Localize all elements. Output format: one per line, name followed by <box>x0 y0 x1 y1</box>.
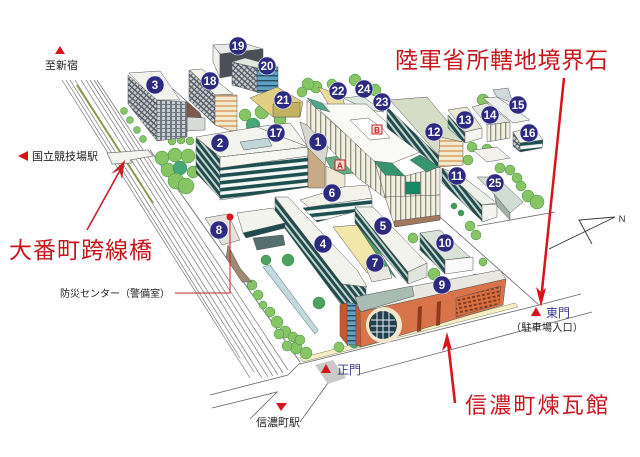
direction: Shinjuku <box>45 46 78 72</box>
long pool <box>263 265 318 334</box>
direction: Shinanomachi station <box>256 403 300 429</box>
numbered building badges: 5 <box>380 221 387 233</box>
numbered building badges: 15 <box>512 100 525 112</box>
building 11 <box>442 168 497 222</box>
numbered building badges: 11 <box>451 171 464 183</box>
building 19 <box>213 43 263 78</box>
marker B <box>372 125 382 135</box>
parking entrance label: （駐車場入口） <box>511 321 583 334</box>
arrow: boundary stone <box>536 78 564 307</box>
building 1 and A wing <box>300 122 365 188</box>
numbered building badges: 3 <box>152 80 158 92</box>
tree clusters <box>120 74 544 359</box>
numbered building badges: 13 <box>459 115 471 127</box>
main gate plaza <box>315 360 346 384</box>
direction: Shinjuku: 至新宿 <box>45 58 78 72</box>
numbered building badges: 18 <box>204 76 217 88</box>
numbered building badges: 6 <box>329 188 335 200</box>
building 8 area <box>205 208 285 282</box>
inner courtyard <box>333 224 396 278</box>
main gate: 正門 <box>337 363 361 377</box>
numbered building badges: 25 <box>489 178 502 190</box>
numbered building badges: 8 <box>216 225 223 237</box>
numbered building badges: 22 <box>332 86 344 98</box>
site front walkway <box>300 303 518 362</box>
east gate: 東門 <box>546 306 570 320</box>
building 21 <box>250 87 303 117</box>
arrow: brick hall <box>442 332 455 403</box>
numbered building badges: 17 <box>270 128 282 140</box>
label: brick hall heading: 信濃町煉瓦館 <box>465 393 608 418</box>
brick hall round window <box>366 301 441 343</box>
compass north: N <box>619 214 626 225</box>
numbered building badges: 20 <box>261 61 273 73</box>
numbered building badges: 12 <box>428 127 440 139</box>
numbered building badges: 10 <box>439 238 451 250</box>
low hall near building 11 <box>473 147 510 162</box>
east gate <box>531 306 570 320</box>
building 13 <box>448 107 482 143</box>
building 5 <box>355 207 427 284</box>
building 10 <box>420 230 473 274</box>
numbered building badges: 14 <box>484 110 497 122</box>
building 25 <box>477 177 523 220</box>
building 6 <box>300 185 372 222</box>
numbered building badges: 23 <box>376 97 388 109</box>
numbered building badges: 2 <box>217 138 223 150</box>
numbered building badges <box>146 37 538 294</box>
building 16 <box>513 127 543 152</box>
building 22 to 24 area <box>318 87 384 112</box>
building 7 <box>366 266 392 282</box>
numbered building badges: 16 <box>523 128 535 140</box>
numbered building badges: 1 <box>315 137 322 149</box>
numbered building badges: 19 <box>232 41 244 53</box>
numbered building badges: 4 <box>320 239 327 251</box>
site ground <box>155 130 520 362</box>
label: overpass heading: 大番町跨線橋 <box>9 237 152 263</box>
building 2 <box>196 127 308 200</box>
compass north <box>549 214 626 249</box>
building 14 <box>472 103 510 142</box>
main gate <box>321 363 361 377</box>
arrow: overpass <box>87 160 125 230</box>
building 3 <box>128 71 205 141</box>
marker B: B <box>374 126 380 135</box>
label: boundary stone heading: 陸軍省所轄地境界石 <box>395 47 608 73</box>
building 4 <box>275 197 367 310</box>
building 15 <box>483 88 530 123</box>
numbered building badges: 9 <box>439 280 445 292</box>
direction: Shinanomachi station: 信濃町駅 <box>256 415 300 429</box>
label: disaster center: 防災センター（警備室） <box>60 287 170 300</box>
building 17 <box>255 123 308 150</box>
numbered building badges: 21 <box>277 95 290 107</box>
building 9 brick hall <box>340 270 506 347</box>
numbered building badges: 24 <box>358 84 371 96</box>
road network <box>210 212 592 422</box>
building 12 <box>387 97 463 168</box>
overpass bridge <box>107 150 153 164</box>
marker A: A <box>337 160 343 170</box>
building 20 <box>232 58 278 93</box>
numbered building badges: 7 <box>372 258 378 270</box>
marker A <box>335 160 345 170</box>
direction: Kokuritsu station: 国立競技場駅 <box>32 149 98 163</box>
main tower B <box>307 98 440 227</box>
building 18 <box>189 69 237 133</box>
disaster center leader line <box>175 214 234 293</box>
railway tracks <box>62 80 300 378</box>
